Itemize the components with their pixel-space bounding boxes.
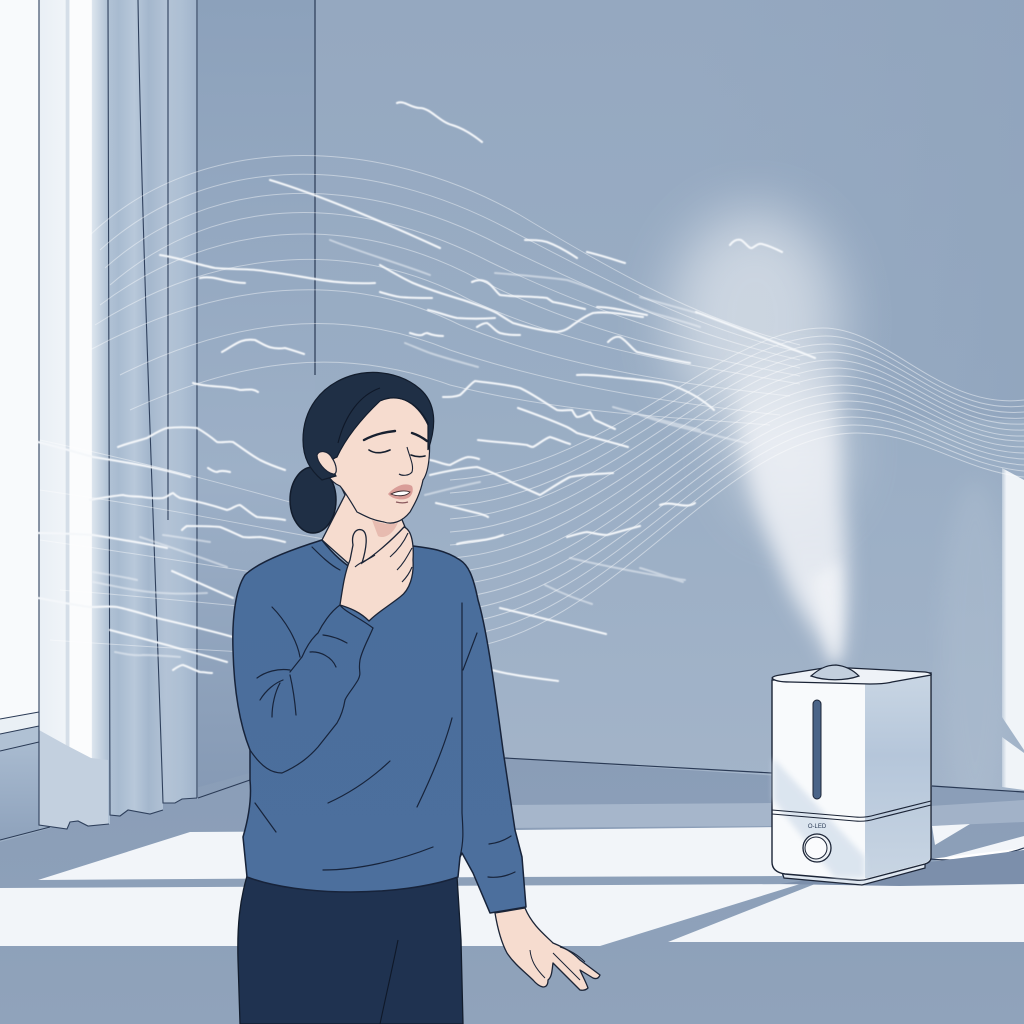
top surface xyxy=(772,667,931,684)
base xyxy=(782,860,925,885)
body xyxy=(772,673,931,880)
eyes closed xyxy=(369,450,425,457)
window xyxy=(0,0,50,840)
curtain xyxy=(39,0,198,829)
cord xyxy=(930,848,1024,860)
thin air flow lines: upper and left families xyxy=(40,156,800,652)
water window xyxy=(813,700,821,799)
wispy air currents: faint xyxy=(93,240,747,657)
separator band xyxy=(772,801,931,821)
thin air flow lines: humidifier wave family xyxy=(450,328,1024,650)
sweater xyxy=(233,540,526,913)
mist glow xyxy=(670,210,847,665)
floor xyxy=(0,758,1024,1024)
lower hand xyxy=(495,908,600,990)
sunlight patches on floor xyxy=(0,824,1024,946)
pants xyxy=(238,876,463,1024)
label: O-LED xyxy=(808,824,827,830)
hair highlight line xyxy=(338,388,380,443)
wall light patch at right xyxy=(1002,468,1024,790)
nose xyxy=(399,447,413,475)
nozzle xyxy=(811,665,859,680)
face xyxy=(323,397,430,523)
ear xyxy=(317,452,336,474)
mouth xyxy=(388,484,413,503)
raised hand on throat xyxy=(340,527,413,621)
knob xyxy=(803,834,831,862)
right side shading xyxy=(865,674,930,878)
pants crease xyxy=(380,940,398,1024)
wispy air currents: bright xyxy=(38,102,815,681)
front shading xyxy=(773,758,865,878)
hair xyxy=(303,372,434,480)
sweater folds and raised sleeve xyxy=(250,547,515,877)
hair bun xyxy=(290,467,336,533)
shadow xyxy=(780,850,1024,886)
neck shadow xyxy=(372,520,398,537)
person xyxy=(233,372,600,1024)
eyebrows xyxy=(364,431,427,441)
humidifier xyxy=(772,665,1024,886)
neck xyxy=(322,480,413,572)
